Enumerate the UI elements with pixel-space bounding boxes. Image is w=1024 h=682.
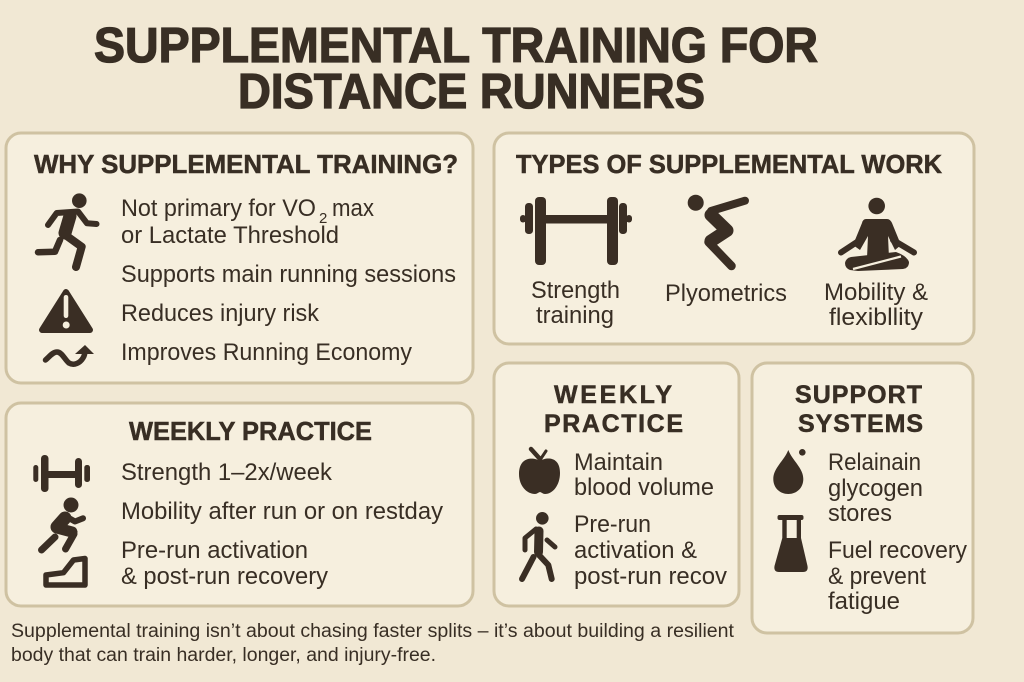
- panel: weekly practice left: [6, 403, 473, 606]
- text: glycogen: [828, 449, 923, 527]
- label: mobility flexibility: [824, 279, 928, 331]
- text: glycogen: stores: [828, 500, 892, 527]
- text: maintain: blood volume: [574, 474, 714, 501]
- icon: squatting figure: [42, 498, 83, 550]
- label: strength training: [531, 277, 620, 329]
- text: not primary: Not primary for VO: [121, 195, 316, 222]
- footer note: body that can train harder, longer, and injury-free.: [11, 645, 436, 666]
- heading: support systems: SYSTEMS: [798, 410, 923, 438]
- text: pre-run: [121, 537, 328, 590]
- icon: apple: [519, 449, 560, 494]
- text: fuel recovery: & prevent: [828, 563, 926, 590]
- title: [94, 19, 818, 119]
- text: reduces: Reduces injury risk: [121, 300, 320, 327]
- text: pre-run: post-run recov: [574, 563, 727, 590]
- heading: weekly practice: PRACTICE: [544, 410, 683, 438]
- footer note: Supplemental training isn’t about chasing faster splits – it’s about building a resilient: [11, 621, 735, 642]
- label: plyometrics: Plyometrics: [665, 280, 787, 307]
- heading: why supplemental training: WHY SUPPLEMENTAL TRAINING?: [34, 149, 458, 179]
- heading: weekly practice: [544, 381, 683, 438]
- icon: warning triangle: [42, 292, 90, 330]
- panel: weekly practice right: [494, 363, 739, 606]
- icon: barbell: [520, 197, 632, 265]
- text: not primary: or Lactate Threshold: [121, 222, 339, 249]
- heading: types: TYPES OF SUPPLEMENTAL WORK: [516, 149, 942, 179]
- footer note: [11, 621, 735, 666]
- label: strength training: Strength: [531, 277, 620, 304]
- icon: wavy arrow: [46, 345, 94, 364]
- text: not primary: [121, 195, 374, 249]
- heading: weekly practice: WEEKLY PRACTICE: [129, 416, 372, 446]
- icon: dumbbell: [33, 455, 90, 492]
- title: SUPPLEMENTAL TRAINING FOR: [94, 19, 818, 73]
- text: fuel recovery: Fuel recovery: [828, 537, 967, 564]
- panel: why supplemental training: [6, 133, 473, 383]
- text: strength: Strength 1–2x/week: [121, 459, 333, 486]
- icon: plyo box: [46, 558, 85, 585]
- text: pre-run: activation &: [574, 537, 697, 564]
- text: not primary: 2: [319, 210, 327, 227]
- text: fuel recovery: fatigue: [828, 588, 900, 615]
- heading: weekly practice: WEEKLY: [554, 381, 672, 409]
- icon: runner: [38, 193, 96, 267]
- text: supports: Supports main running sessions: [121, 261, 456, 288]
- panel: support systems: [752, 363, 973, 633]
- text: pre-run: Pre-run: [574, 511, 651, 538]
- text: pre-run: & post-run recovery: [121, 563, 328, 590]
- text: fuel recovery: [828, 537, 967, 615]
- text: mobility: Mobility after run or on restday: [121, 498, 443, 525]
- text: maintain: Maintain: [574, 449, 663, 476]
- text: not primary: max: [332, 195, 374, 222]
- text: glycogen: glycogen: [828, 475, 923, 502]
- icon: drop: [773, 449, 806, 494]
- text: maintain: [574, 449, 714, 501]
- heading: support systems: SUPPORT: [795, 381, 922, 409]
- panel: types of supplemental work: [494, 133, 974, 344]
- text: pre-run: Pre-run activation: [121, 537, 308, 564]
- label: mobility flexibility: flexibllity: [829, 304, 923, 331]
- heading: support systems: [795, 381, 923, 438]
- title: DISTANCE RUNNERS: [238, 65, 705, 119]
- label: strength training: training: [536, 302, 614, 329]
- icon: walking figure: [522, 512, 555, 579]
- icon: flask: [774, 515, 808, 572]
- text: improves: Improves Running Economy: [121, 339, 412, 366]
- text: glycogen: Relainain: [828, 449, 921, 476]
- icon: jumping figure: [688, 195, 745, 266]
- icon: meditating figure: [841, 198, 914, 271]
- label: mobility flexibility: Mobility &: [824, 279, 928, 306]
- text: pre-run: [574, 511, 727, 590]
